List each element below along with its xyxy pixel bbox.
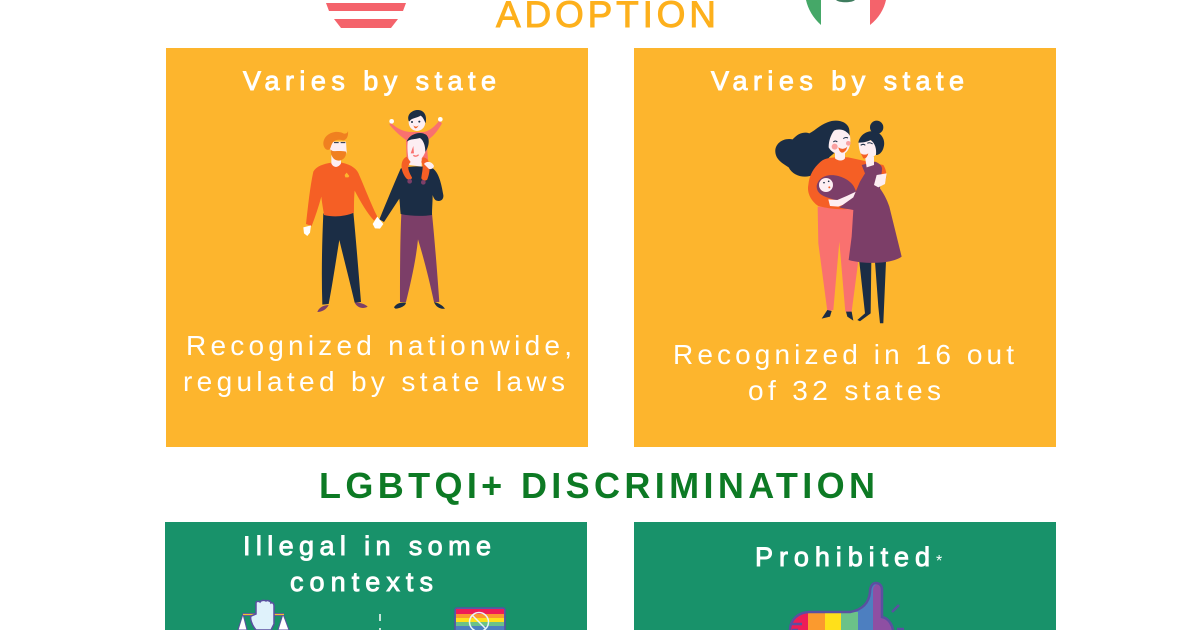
left woman face	[829, 130, 850, 154]
panel: US discrimination	[165, 522, 587, 630]
right man legs	[400, 213, 439, 302]
heading: illegal in some contexts: Illegal in some	[243, 531, 491, 561]
dress	[839, 162, 902, 263]
heading: illegal in some contexts: contexts	[290, 567, 433, 597]
heading: varies by state, Mexico: Varies by state	[711, 66, 964, 96]
body text: US adoption status	[183, 330, 572, 397]
sweater	[808, 157, 886, 209]
panel: Mexico discrimination	[634, 522, 1056, 630]
right woman head	[859, 139, 878, 158]
icon: raised hand over scales	[238, 600, 289, 630]
baby	[817, 175, 856, 201]
right man torso	[379, 166, 443, 222]
body text: Mexico adoption status	[673, 339, 1014, 406]
panel: Mexico adoption	[634, 48, 1056, 447]
icon: rainbow thumbs up	[790, 583, 904, 630]
body text: US adoption status: Recognized nationwide,	[186, 330, 572, 361]
right woman legs	[857, 262, 886, 323]
heading: prohibited: *	[936, 553, 942, 570]
icon: US flag	[326, 3, 406, 28]
heading: LGBTQI+ discrimination: LGBTQI+ DISCRIMINATION	[319, 465, 875, 506]
body text: Mexico adoption status: Recognized in 16 out	[673, 339, 1014, 370]
child	[389, 121, 442, 160]
panel: US adoption	[166, 48, 588, 447]
heading: prohibited: Prohibited	[755, 542, 930, 572]
left man head	[329, 142, 347, 158]
left man legs	[322, 212, 361, 305]
body text: Mexico adoption status: of 32 states	[748, 375, 941, 406]
icon: central dashed divider	[379, 614, 381, 630]
child legs	[402, 157, 412, 180]
left man torso	[306, 163, 377, 226]
pants	[818, 207, 858, 312]
illustration: two mothers and baby	[775, 121, 902, 323]
heading: varies by state, US: Varies by state	[243, 66, 496, 96]
heading: illegal in some contexts	[243, 531, 491, 597]
icon: rainbow flag with prohibition sign	[455, 608, 505, 630]
body text: US adoption status: regulated by state laws	[183, 366, 565, 397]
illustration: two fathers and child	[303, 110, 445, 312]
icon: Mexico flag	[806, 0, 886, 25]
hair	[775, 121, 850, 177]
right man head	[407, 136, 426, 167]
